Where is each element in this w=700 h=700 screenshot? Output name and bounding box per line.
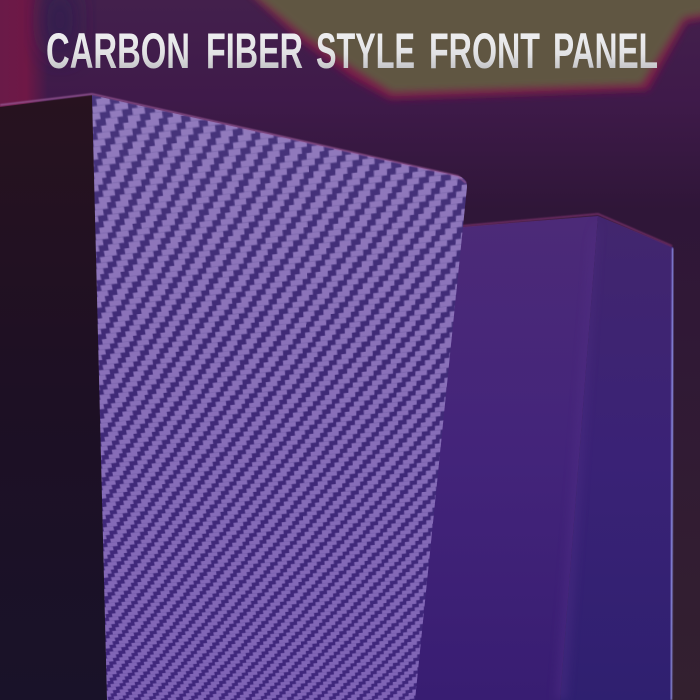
title	[46, 23, 658, 79]
title: FIBER	[206, 23, 303, 79]
carbon fiber front face	[92, 95, 467, 700]
title: CARBON	[46, 23, 190, 79]
title: STYLE	[316, 23, 415, 79]
left panel dark side face	[0, 95, 107, 700]
title: FRONT	[429, 23, 540, 79]
top edge highlight	[0, 94, 466, 183]
right panel: purple tower	[405, 214, 673, 700]
